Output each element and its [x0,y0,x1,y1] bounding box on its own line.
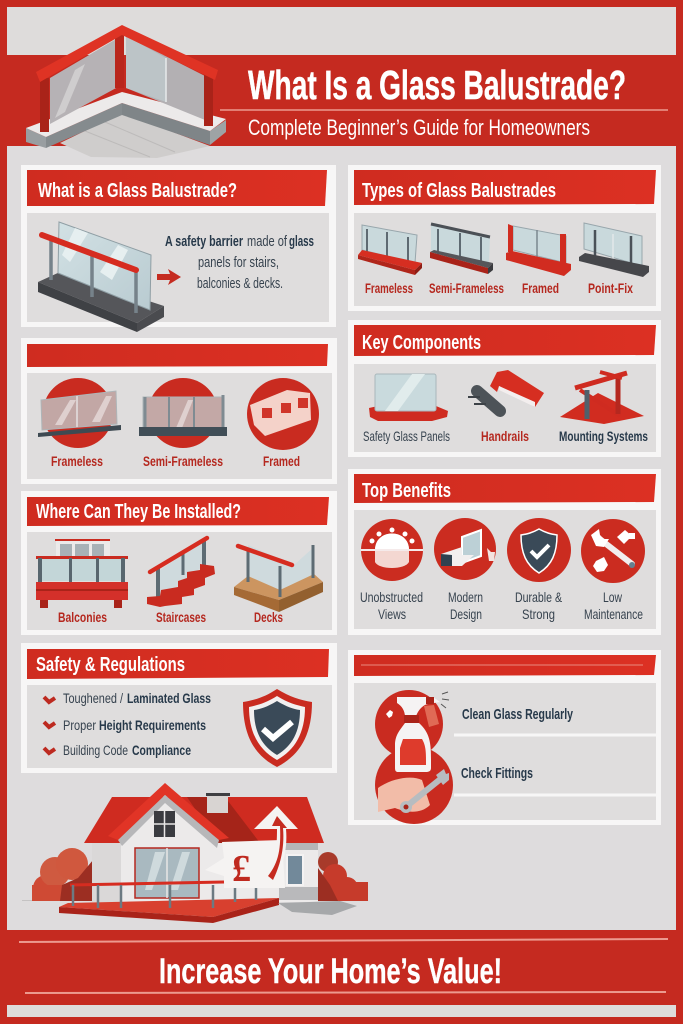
item: staircases: Staircases [156,609,206,625]
item: check fittings: Check Fittings [461,765,533,782]
description text: glass [289,233,314,250]
list item: Proper [63,717,96,733]
heading: Where Can They Be Installed? [36,501,241,523]
item: durable and strong: Durable & [515,589,562,605]
item: modern design [434,518,496,622]
item: frameless type: Frameless [365,280,413,296]
icon: spray bottle and wrench [375,690,453,824]
item: framed: Framed [263,453,300,469]
item: balconies: Balconies [58,609,107,625]
item: frameless [38,378,121,469]
panel: where can they be installed [21,491,337,635]
item: decks: Decks [254,609,283,625]
item: durable and strong [507,518,571,622]
item: semi-frameless type: Semi-Frameless [429,280,504,296]
item: framed type [506,224,571,296]
panel: what is a glass balustrade [21,165,336,332]
list item: Building Code [63,742,128,758]
item: mounting systems [559,372,648,444]
heading: Top Benefits [362,480,451,502]
panel: maintenance [348,650,661,825]
blank heading bar [27,344,328,367]
description text [165,233,314,292]
item: unobstructed views: Views [378,606,406,622]
panel: types of glass balustrades [348,165,661,311]
illustration: house with value arrow: £ [232,848,251,890]
item: unobstructed views: Unobstructed [360,589,423,605]
icon: shield with check [243,689,312,767]
list item [44,690,211,706]
item: unobstructed views [360,519,423,622]
panel: top benefits [348,469,661,635]
icon: balustrade section [38,222,164,332]
item: framed type: Framed [522,280,559,296]
icon: corner glass balustrade [26,25,226,158]
item: point-fix type [579,223,649,296]
description text: panels for stairs, [198,254,279,271]
heading [27,170,327,206]
item: low maintenance: Low [603,589,623,605]
panel: safety and regulations [21,643,337,773]
heading [27,649,329,679]
heading [354,325,656,356]
item: frameless type [358,225,422,296]
list item: Laminated Glass [127,690,211,706]
item: staircases [147,538,215,625]
item: handrails: Handrails [481,428,529,444]
item: framed [247,378,319,469]
arrow [157,269,181,285]
item: balconies [36,539,128,625]
item: safety glass panels: Safety Glass Panels [363,428,450,444]
list item [44,742,191,758]
item: modern design: Design [450,606,482,622]
item: low maintenance [581,519,645,622]
item: safety glass panels [363,374,450,444]
item: low maintenance: Maintenance [584,606,643,622]
heading: Safety & Regulations [36,654,185,676]
item: durable and strong: Strong [522,606,555,622]
heading: Types of Glass Balustrades [362,180,556,202]
heading [354,474,656,503]
item: decks [234,545,323,625]
item: semi-frameless [139,378,227,469]
item: clean glass regularly: Clean Glass Regularly [462,706,573,723]
heading [354,170,656,205]
footer call to action: Increase Your Home’s Value! [159,952,502,991]
description text: made of [247,233,288,250]
header banner [0,25,683,158]
item: frameless: Frameless [51,453,103,469]
item: point-fix type: Point-Fix [588,280,633,296]
item: semi-frameless: Semi-Frameless [143,453,223,469]
list item: Compliance [132,742,191,758]
subtitle: Complete Beginner’s Guide for Homeowners [248,115,590,140]
panel: key components [348,320,661,457]
item: mounting systems: Mounting Systems [559,428,648,444]
illustration: house with value arrow [22,783,370,923]
list item: Height Requirements [99,717,206,733]
list item [44,717,206,733]
description text: A safety barrier [165,233,243,250]
item: handrails [468,370,544,444]
item: semi-frameless type [429,224,504,296]
footer banner [0,930,683,1005]
panel: glass styles [21,338,337,484]
list item: Toughened / [63,690,123,706]
blank heading bar [354,655,656,676]
heading: Key Components [362,332,481,354]
heading: What is a Glass Balustrade? [38,180,237,202]
description text: balconies & decks. [197,275,283,292]
item: modern design: Modern [448,589,483,605]
